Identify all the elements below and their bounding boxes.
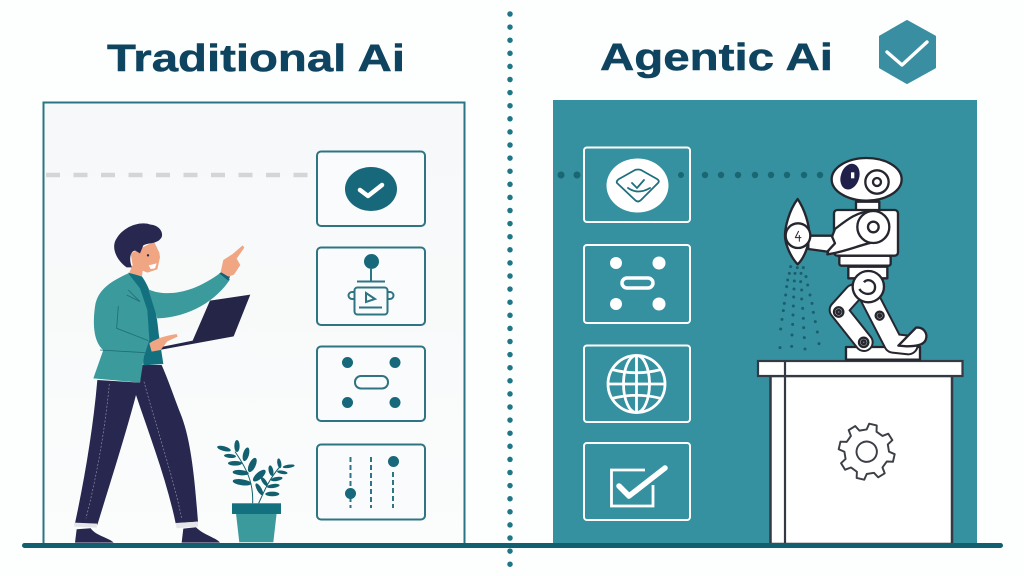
robot head [832, 158, 902, 201]
card: joystick and video pot [317, 248, 425, 325]
card: sliders [317, 444, 425, 520]
robot front leg [834, 293, 868, 347]
centre dotted divider [507, 14, 513, 572]
ground line [22, 543, 1003, 548]
heading: Traditional Ai: Traditional Ai [107, 38, 405, 80]
dotted connector: agentic [558, 172, 823, 178]
dashed connector: traditional [46, 173, 313, 177]
person lower hand [149, 334, 178, 352]
robot rear leg and foot [867, 292, 926, 346]
card: eye badge [584, 148, 690, 222]
illustration: robot [778, 158, 926, 360]
person sweater [128, 273, 163, 365]
card: globe [584, 346, 690, 422]
icon: gear [833, 418, 900, 485]
person cuffs and shoes [74, 522, 220, 543]
icon: hexagon check badge [880, 21, 935, 83]
card: nodes around pill [317, 346, 425, 421]
person raised hand [221, 245, 244, 277]
card: check circle [317, 152, 425, 226]
panel: agentic ai [553, 100, 977, 545]
person raised arm [148, 273, 230, 318]
heading: Agentic Ai: Agentic Ai [600, 37, 833, 79]
card: nodes around pill (agentic) [584, 245, 690, 323]
plant [217, 440, 295, 542]
person jacket [93, 273, 149, 383]
robot arm and sprayer [785, 199, 835, 264]
robot spray droplets [778, 265, 820, 350]
laptop [159, 295, 250, 350]
person legs [75, 365, 198, 525]
robot hip spiral [848, 267, 887, 302]
robot foot base [846, 347, 920, 360]
illustration: person with laptop [74, 223, 295, 543]
pedestal [758, 361, 962, 544]
person head [114, 223, 162, 277]
robot torso [827, 202, 898, 266]
card: checkbox [584, 443, 690, 520]
panel: traditional ai [44, 102, 464, 544]
